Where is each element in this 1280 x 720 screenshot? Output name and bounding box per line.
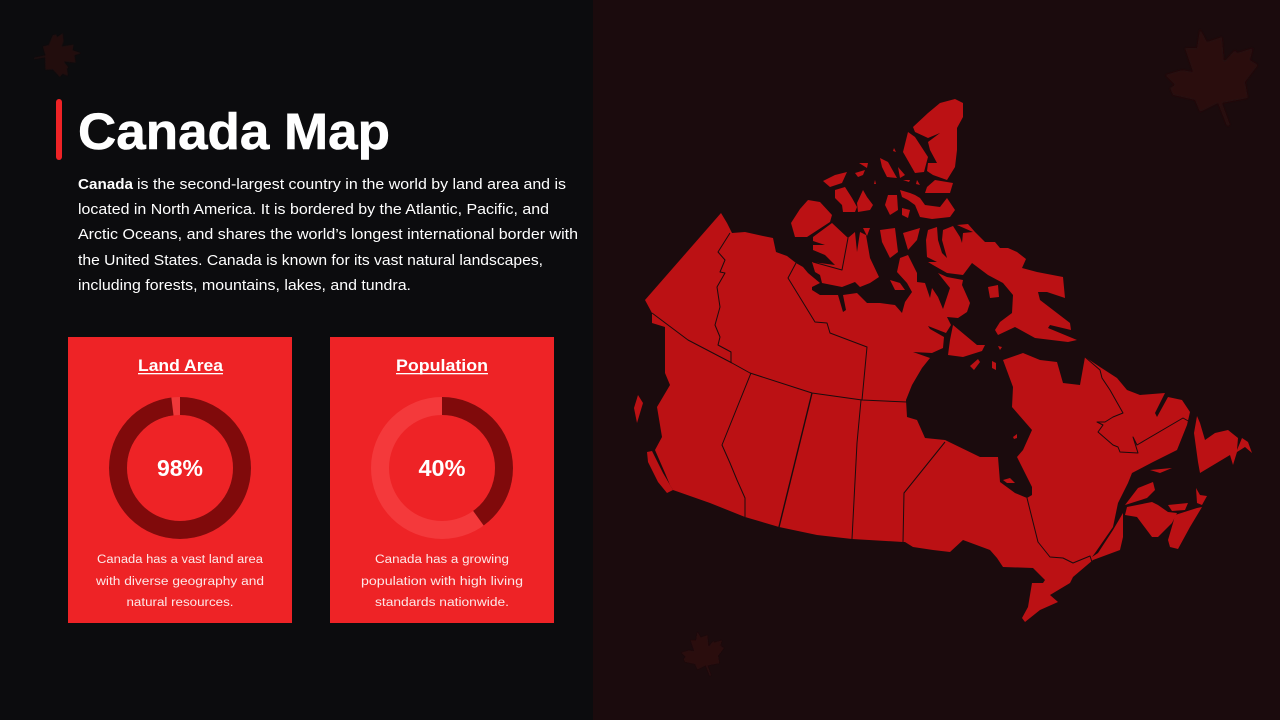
donut chart: 98%: 98% — [157, 455, 203, 481]
donut chart: 40%: 40% — [418, 455, 466, 481]
text block: description: the United States. Canada is known for its vast natural landscapes, — [78, 253, 543, 269]
text: land area description — [95, 554, 264, 609]
map: arctic islands — [791, 99, 1077, 370]
title: Canada Map — [78, 103, 390, 160]
map of Canada — [634, 99, 1252, 622]
text block: description: is the second-largest country in the world by land area and is — [137, 177, 566, 193]
text block: description: Canada — [78, 177, 134, 193]
heading: land area: Land Area — [138, 356, 224, 375]
map: provincial borders — [652, 233, 1190, 563]
panel: land area — [68, 337, 292, 623]
text: population description — [361, 554, 523, 609]
icon: maple leaf bottom — [681, 631, 724, 676]
text: population description: population with high living — [361, 576, 523, 588]
icon: maple leaf top right — [1165, 29, 1258, 126]
text block: description — [78, 177, 578, 294]
text block: description: Arctic Oceans, and shares the world’s longest international border with — [78, 227, 578, 243]
heading: population: Population — [396, 356, 488, 375]
map: west coast and east coast islands — [634, 395, 1252, 549]
text: land area description: natural resources. — [126, 597, 234, 609]
text: population description: standards nationwide. — [375, 597, 509, 609]
panel: population — [330, 337, 554, 623]
icon: maple leaf top left — [31, 29, 84, 80]
text block: description: located in North America. It is bordered by the Atlantic, Pacific, and — [78, 202, 549, 218]
text: population description: Canada has a growing — [375, 554, 509, 566]
donut chart: 98% — [118, 406, 242, 530]
text block: description: including forests, mountains, lakes, and tundra. — [78, 278, 411, 294]
text: land area description: with diverse geography and — [95, 576, 264, 588]
map: mainland — [645, 213, 1190, 622]
donut chart: 40% — [380, 406, 504, 530]
text: land area description: Canada has a vast land area — [97, 554, 264, 566]
title accent bar — [56, 99, 62, 160]
